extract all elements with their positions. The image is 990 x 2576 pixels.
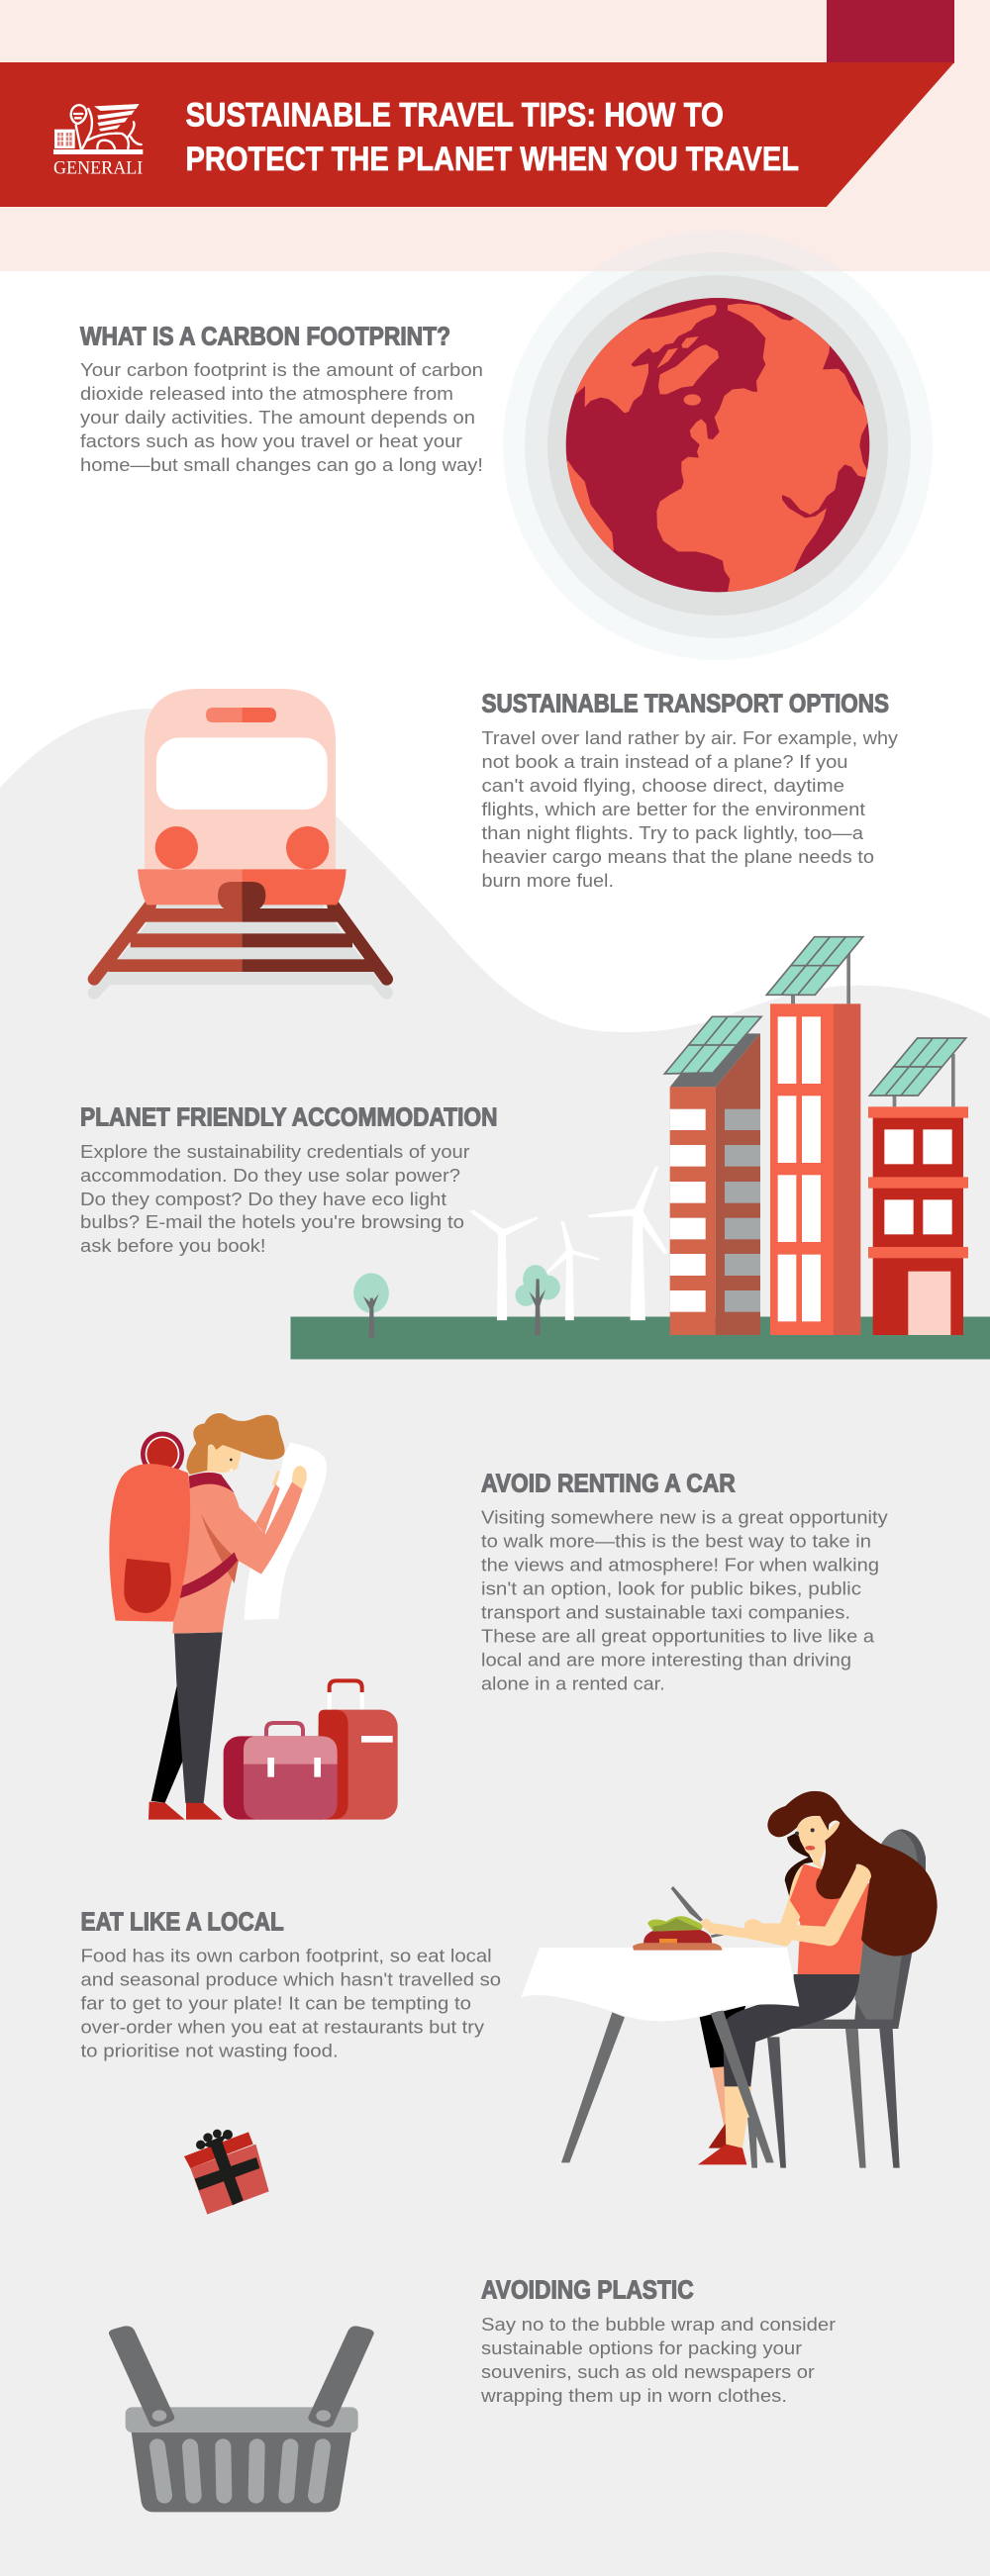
tree right <box>515 1265 560 1335</box>
wind turbines and trees <box>353 1167 668 1337</box>
text block: transport: not book a train instead of a plane? If you <box>481 751 847 772</box>
text block: accommodation: ask before you book! <box>80 1235 265 1256</box>
text block: transport <box>481 689 899 891</box>
logo: Generali lion: GENERALI <box>53 158 143 179</box>
text block: transport: flights, which are better for the environment <box>481 799 865 819</box>
bag <box>224 1723 338 1820</box>
backpack <box>109 1464 190 1622</box>
heading: SUSTAINABLE TRANSPORT OPTIONS <box>481 689 889 718</box>
text block: avoiding plastic <box>480 2275 836 2406</box>
text block: transport: burn more fuel. <box>481 870 614 891</box>
gift icon <box>184 2130 269 2215</box>
text block: accommodation: Do they compost? Do they have eco light <box>80 1189 446 1209</box>
cutlery <box>671 1886 703 1922</box>
train illustration <box>94 689 387 993</box>
globe map <box>564 298 873 604</box>
text block: renting a car: Visiting somewhere new is a great opportunity <box>481 1506 889 1527</box>
heading: AVOID RENTING A CAR <box>481 1468 736 1497</box>
ground <box>291 1316 990 1360</box>
text block: transport: can't avoid flying, choose direct, daytime <box>481 775 844 796</box>
text block: renting a car: transport and sustainable taxi companies. <box>481 1601 850 1622</box>
title: SUSTAINABLE TRAVEL TIPS: HOW TO <box>186 97 724 135</box>
map paper <box>245 1443 327 1620</box>
logo: Generali lion <box>53 104 143 179</box>
text block: renting a car: isn't an option, look for public bikes, public <box>481 1577 861 1598</box>
heading: AVOIDING PLASTIC <box>481 2275 694 2305</box>
text block: carbon footprint: home—but small changes can go a long way! <box>80 454 483 475</box>
hair <box>767 1791 938 1956</box>
heading: WHAT IS A CARBON FOOTPRINT? <box>80 321 450 350</box>
globe illustration <box>503 231 933 660</box>
suitcase <box>319 1680 398 1820</box>
table leg <box>561 2012 625 2162</box>
text block: carbon footprint <box>80 321 483 475</box>
text block: renting a car: local and are more interesting than driving <box>481 1649 851 1670</box>
basket icon <box>109 2326 374 2512</box>
text block: renting a car: the views and atmosphere! For when walking <box>481 1554 879 1574</box>
text block: renting a car: These are all great opportunities to live like a <box>481 1625 875 1646</box>
heading: PLANET FRIENDLY ACCOMMODATION <box>80 1102 497 1132</box>
header panel <box>0 0 990 271</box>
plate of food <box>633 1916 722 1951</box>
text block: accommodation: Explore the sustainability credentials of your <box>80 1141 470 1162</box>
diner at table illustration <box>521 1791 938 2168</box>
text block: eat like a local: over-order when you eat at restaurants but try <box>81 2017 485 2038</box>
text block: accommodation: accommodation. Do they use solar power? <box>80 1165 460 1186</box>
buildings with solar panels <box>664 937 968 1335</box>
text block: renting a car: to walk more—this is the best way to take in <box>481 1530 871 1551</box>
text block: carbon footprint: factors such as how you travel or heat your <box>80 430 462 451</box>
text block: transport: than night flights. Try to pack lightly, too—a <box>481 822 864 843</box>
title: PROTECT THE PLANET WHEN YOU TRAVEL <box>186 141 799 178</box>
text block: eat like a local: Food has its own carbon footprint, so eat local <box>81 1946 492 1966</box>
text block: transport: heavier cargo means that the plane needs to <box>481 846 874 867</box>
text block: eat like a local: and seasonal produce which hasn't travelled so <box>81 1969 501 1990</box>
title <box>186 97 799 178</box>
tree left <box>353 1273 389 1337</box>
text block: avoiding plastic: Say no to the bubble wrap and consider <box>481 2314 836 2335</box>
chair <box>747 1829 926 2168</box>
text block: avoiding plastic: sustainable options for packing your <box>481 2337 802 2358</box>
text block: accommodation <box>80 1102 497 1256</box>
building left <box>664 1016 761 1335</box>
building right <box>868 1038 968 1335</box>
text block: transport: Travel over land rather by air. For example, why <box>481 727 899 748</box>
text block: renting a car: alone in a rented car. <box>481 1672 665 1693</box>
text block: eat like a local <box>81 1907 501 2061</box>
text block: avoiding plastic: souvenirs, such as old newspapers or <box>481 2361 815 2382</box>
building middle <box>766 937 863 1335</box>
text block: carbon footprint: dioxide released into the atmosphere from <box>80 383 453 404</box>
text block: carbon footprint: Your carbon footprint is the amount of carbon <box>80 359 483 380</box>
text block: accommodation: bulbs? E-mail the hotels you're browsing to <box>80 1211 464 1232</box>
text block: eat like a local: far to get to your plate! It can be tempting to <box>81 1993 471 2014</box>
text block: eat like a local: to prioritise not wasting food. <box>81 2041 339 2061</box>
hair <box>186 1413 285 1475</box>
text block: renting a car <box>481 1468 889 1693</box>
tablecloth <box>521 1948 799 2021</box>
traveller illustration <box>109 1413 398 1820</box>
text block: carbon footprint: your daily activities. The amount depends on <box>80 407 475 428</box>
heading: EAT LIKE A LOCAL <box>81 1907 284 1937</box>
text block: avoiding plastic: wrapping them up in worn clothes. <box>480 2385 787 2406</box>
background wave <box>0 709 990 2576</box>
